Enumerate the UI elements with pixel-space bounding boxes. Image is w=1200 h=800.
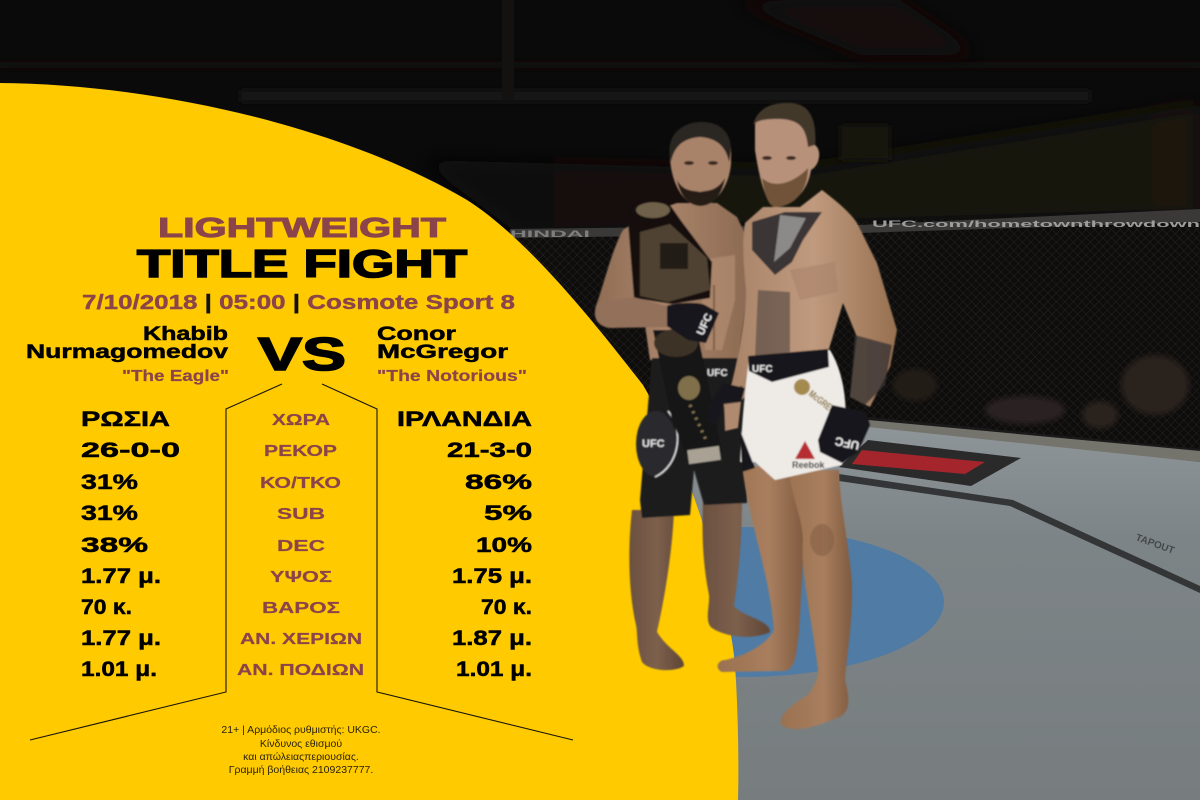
name: Khabib (26, 324, 229, 363)
stat categories: DEC (277, 538, 326, 555)
responsible gambling note: και απώλειαςπεριουσίας. (243, 751, 359, 763)
stat categories (237, 412, 364, 679)
stats: Conor: ΙΡΛΑΝΔΙΑ (397, 408, 532, 431)
stats: Conor: 1.75 μ. (452, 565, 532, 588)
yellow panel (0, 83, 738, 800)
glove (818, 405, 870, 463)
fighter names (26, 324, 527, 385)
stat categories: ΡΕΚΟΡ (264, 443, 337, 460)
nickname: The Notorious: "The Notorious" (377, 368, 527, 385)
stats: Khabib: 1.77 μ. (81, 565, 161, 588)
wrist wrap and hand (707, 383, 745, 425)
octagon mat: TAPOUT (1134, 532, 1176, 557)
stats: Conor: 1.87 μ. (452, 627, 532, 650)
octagon mat (538, 427, 1200, 800)
title belt (628, 202, 722, 464)
bracket lines (30, 384, 573, 740)
heading: TITLE FIGHT (137, 243, 467, 286)
stats: Conor: 10% (476, 534, 532, 557)
arm and torso (595, 203, 748, 360)
fighter: Conor McGregor: UFC (752, 364, 773, 375)
stats: Conor: 5% (484, 502, 533, 525)
nickname: The Eagle: "The Eagle" (122, 368, 229, 385)
name: Khabib: Khabib (143, 324, 228, 345)
stat categories: ΒΑΡΟΣ (262, 600, 341, 617)
stat categories: SUB (277, 506, 325, 523)
mat logo (839, 440, 1021, 486)
white shorts (740, 350, 846, 480)
forearm (595, 297, 670, 328)
fighter: Khabib Nurmagomedov: UFC (642, 438, 665, 450)
stats: Khabib: 31% (81, 502, 138, 525)
stat categories: ΚΟ/ΤΚΟ (260, 475, 341, 492)
stats: Khabib: 26-0-0 (81, 439, 180, 462)
tattoos (752, 212, 892, 405)
head (755, 104, 819, 207)
glove (667, 303, 719, 343)
legs (629, 510, 684, 670)
stat categories: ΧΩΡΑ (272, 412, 331, 429)
octagon cage fence: HINDAI (510, 229, 590, 239)
stats: Conor: 1.01 μ. (456, 658, 532, 681)
fighter: Khabib Nurmagomedov: UFC (695, 312, 715, 337)
right leg (718, 465, 805, 672)
date and channel: 7/10/2018 | 05:00 | Cosmote Sport 8 (82, 292, 515, 314)
torso and arms (730, 190, 897, 407)
stats: Conor (397, 408, 533, 681)
stat categories: ΑΝ. ΠΟΔΙΩΝ (237, 662, 364, 679)
name: Conor: McGregor (377, 342, 509, 363)
versus: VS (258, 328, 346, 380)
stats: Conor: 21-3-0 (447, 439, 532, 462)
stats: Khabib: ΡΩΣΙΑ (81, 408, 170, 431)
name: Conor (377, 324, 509, 363)
name: Khabib: Nurmagomedov (26, 342, 229, 363)
responsible gambling note (221, 724, 381, 776)
responsible gambling note: Γραμμή βοήθειας 2109237777. (229, 764, 373, 776)
stats: Khabib: 1.01 μ. (81, 658, 157, 681)
blue logo circle (538, 527, 944, 677)
responsible gambling note: Κίνδυνος εθισμού (260, 738, 342, 750)
stats: Khabib: 38% (81, 534, 149, 557)
stats: Khabib (81, 408, 180, 681)
stats: Khabib: 1.77 μ. (81, 627, 161, 650)
heading: LIGHTWEIGHT (158, 212, 446, 243)
fighter: Khabib Nurmagomedov: UFC (707, 368, 728, 379)
fighter: Conor McGregor: Reebok (792, 460, 826, 470)
stats: Khabib: 31% (81, 471, 138, 494)
stat categories: ΥΨΟΣ (270, 569, 333, 586)
stats: Khabib: 70 κ. (81, 596, 132, 619)
stats: Conor: 86% (465, 471, 533, 494)
left leg (781, 470, 852, 729)
responsible gambling note: 21+ | Αρμόδιος ρυθμιστής: UKGC. (221, 724, 381, 736)
stat categories: ΑΝ. ΧΕΡΙΩΝ (240, 631, 362, 648)
name: Conor: Conor (377, 324, 457, 345)
octagon cage fence (500, 209, 1200, 462)
fighter: Conor McGregor (707, 103, 897, 729)
fighter: Conor McGregor: McGREGOR (806, 389, 846, 424)
octagon cage fence: UFC.com/hometownthrowdown (872, 219, 1200, 229)
fighter: Khabib Nurmagomedov (595, 122, 770, 670)
head (670, 124, 731, 206)
shorts (640, 358, 747, 518)
fighter: Conor McGregor: UFC (833, 434, 861, 453)
stats: Conor: 70 κ. (481, 596, 532, 619)
heading (137, 212, 467, 286)
